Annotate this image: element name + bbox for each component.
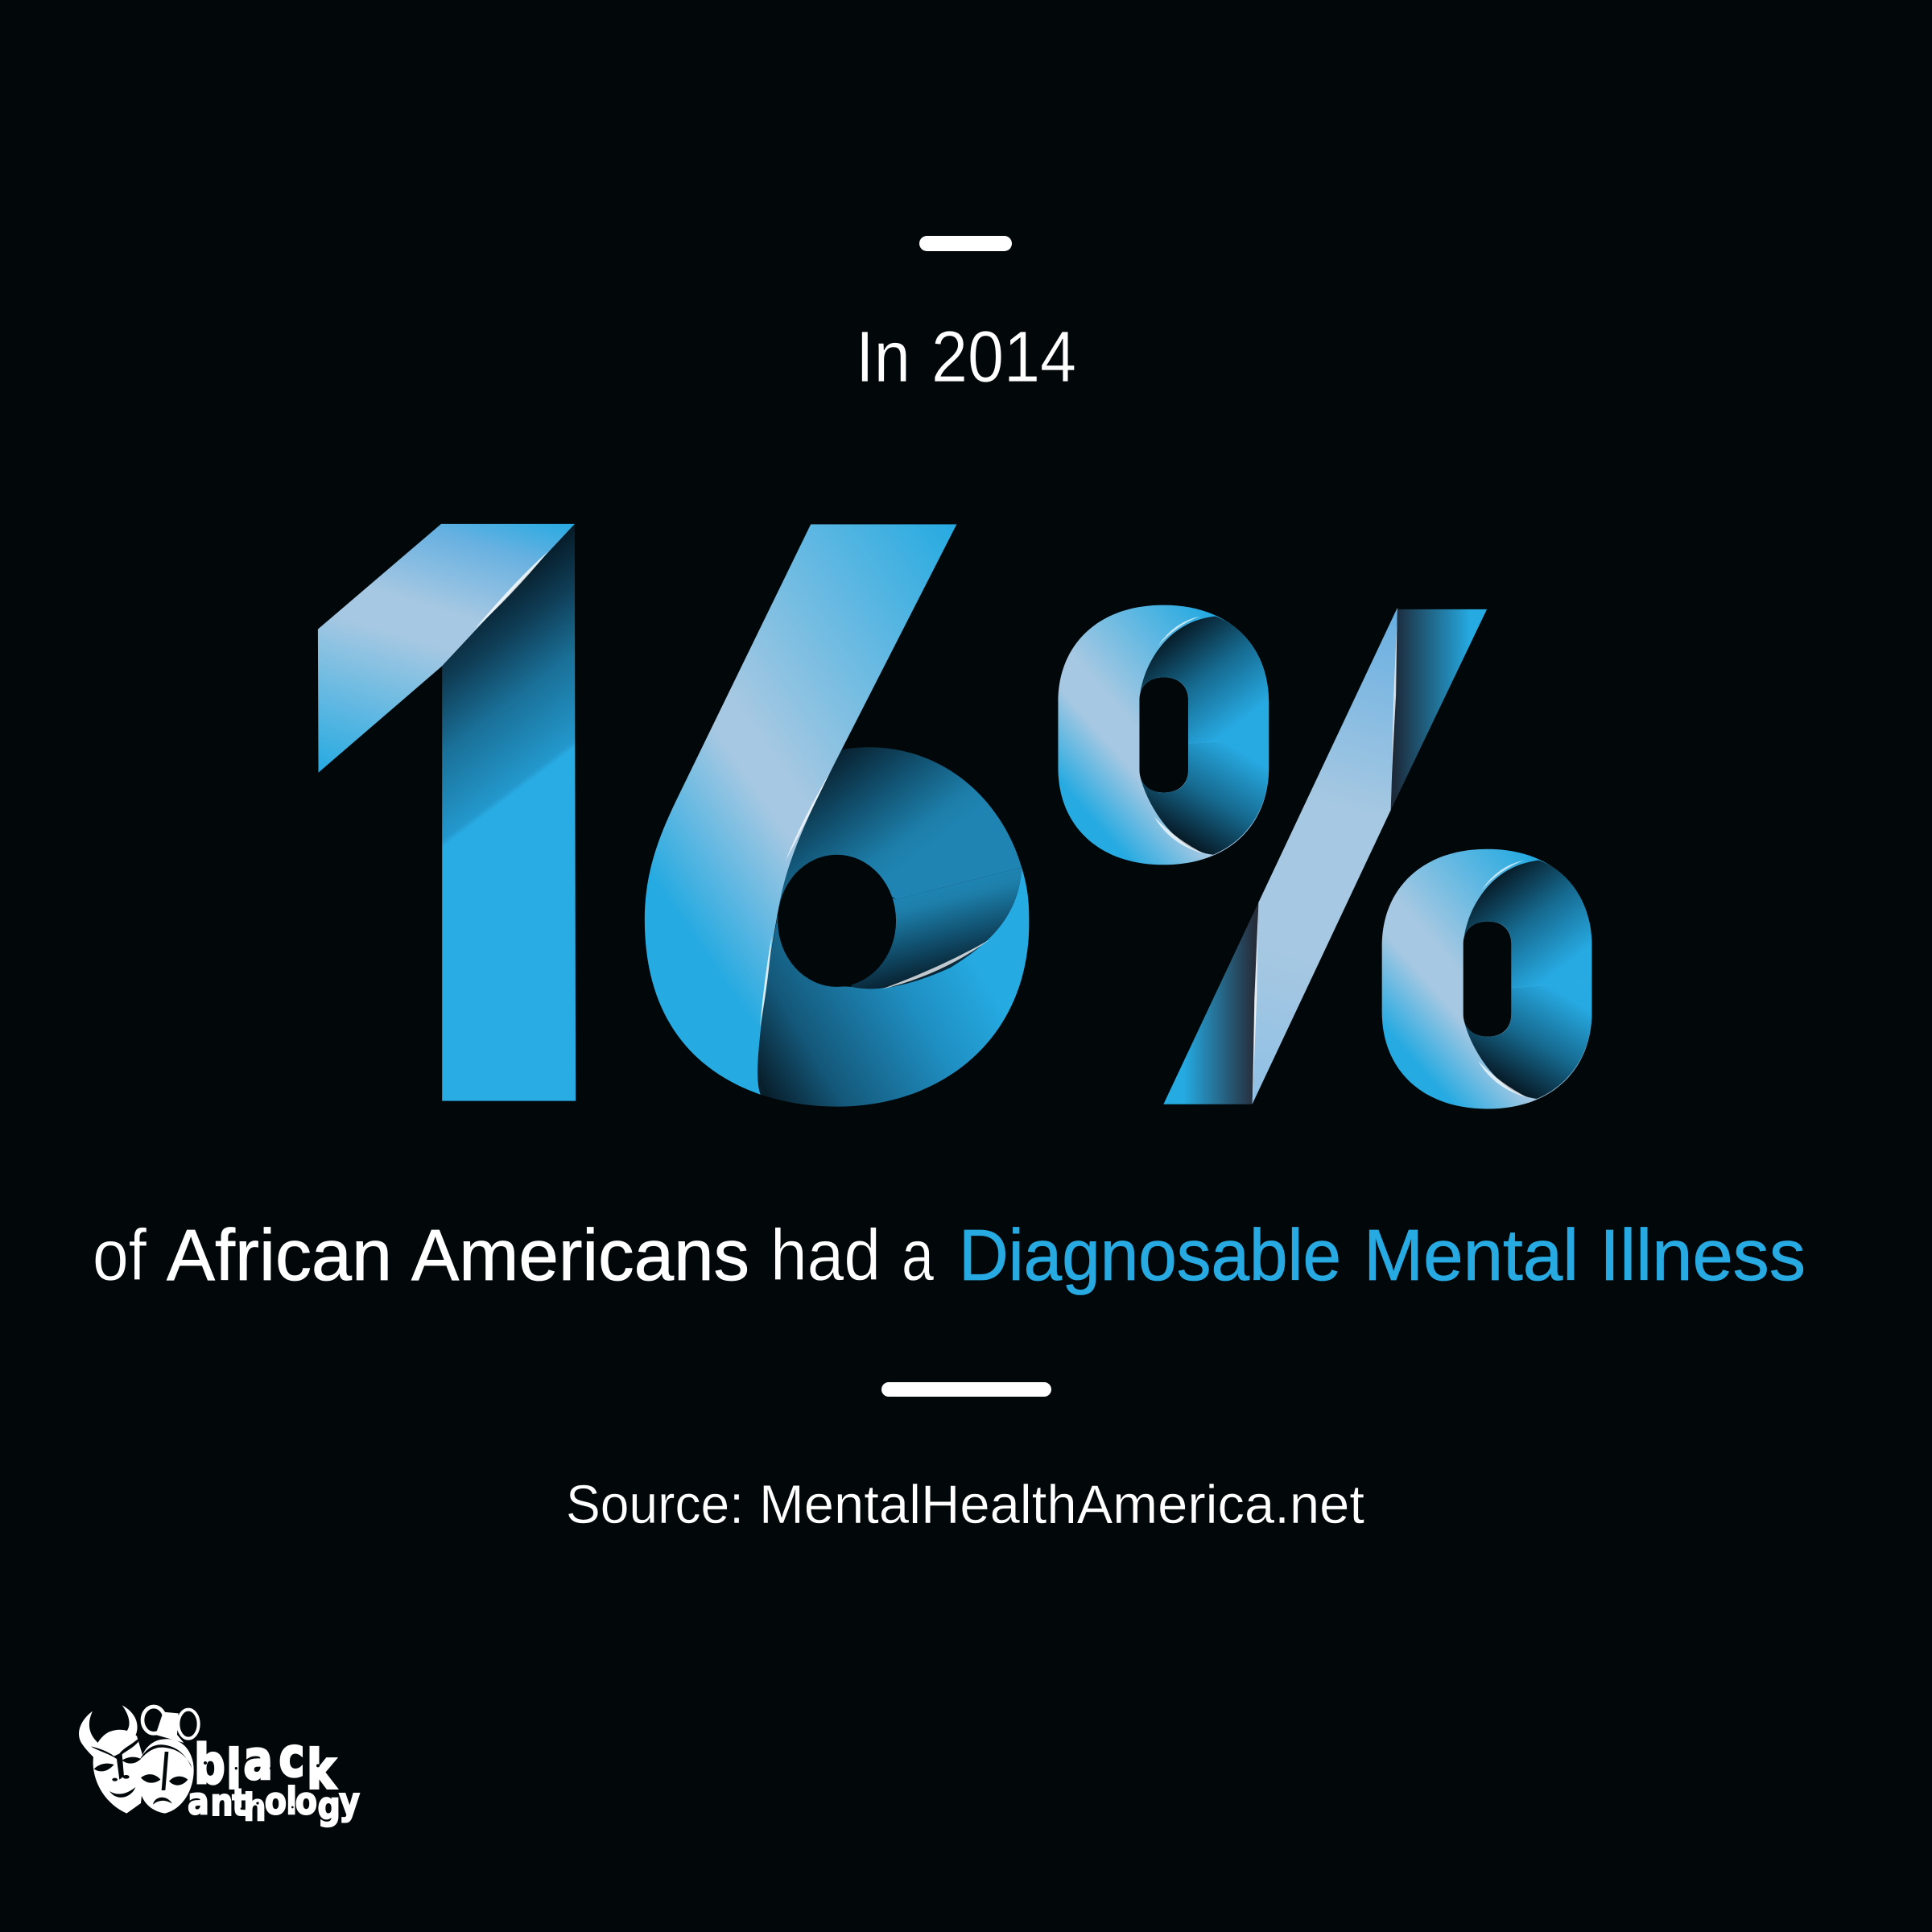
right mask xyxy=(138,1707,199,1814)
Diagnosable: Diagnosable xyxy=(959,1216,1341,1296)
counter hole xyxy=(778,855,896,987)
stem with shaded fold xyxy=(442,524,576,1101)
big symbol: percent sign xyxy=(1058,605,1591,1108)
statement line xyxy=(93,1216,1806,1296)
slash fold highlights xyxy=(1392,618,1397,778)
had: had xyxy=(770,1216,881,1296)
wordmark black: black xyxy=(194,1727,336,1802)
a: a xyxy=(902,1216,935,1296)
middle bowl shade xyxy=(837,868,1022,989)
Illness: Illness xyxy=(1600,1216,1806,1296)
big number: 1 xyxy=(318,524,576,1101)
upper bowl shade xyxy=(778,747,1022,907)
heading: In 2014 xyxy=(856,317,1076,398)
slash top fold xyxy=(1391,609,1487,810)
wordmark anthology: anthology xyxy=(188,1780,360,1831)
of: of xyxy=(93,1216,147,1296)
bottom divider bar xyxy=(881,1382,1051,1397)
source line xyxy=(566,1474,1364,1535)
Mental: Mental xyxy=(1364,1216,1579,1296)
2014: 2014 xyxy=(931,317,1076,398)
lower zero xyxy=(1382,849,1591,1108)
Source label: Source: xyxy=(566,1474,744,1535)
slash bottom fold xyxy=(1163,902,1258,1104)
upper zero xyxy=(1058,605,1269,865)
slash centre xyxy=(1253,608,1397,1104)
ribbon stroke of the 6 xyxy=(645,524,956,1095)
big number: 6 xyxy=(645,524,1029,1107)
slash lower highlight xyxy=(1253,911,1258,1101)
left mask xyxy=(79,1705,145,1814)
fold highlights xyxy=(785,771,831,861)
logo: black anthology xyxy=(79,1705,360,1831)
top divider bar xyxy=(919,236,1012,251)
folded flag xyxy=(318,524,575,773)
Americans: Americans xyxy=(411,1216,749,1296)
wordmark texture speckles xyxy=(204,1761,330,1810)
African: African xyxy=(167,1216,392,1296)
lower bowl xyxy=(758,868,1029,1107)
In: In xyxy=(856,317,910,398)
source url: MentalHealthAmerica.net xyxy=(759,1474,1364,1535)
fold highlight xyxy=(475,551,548,630)
